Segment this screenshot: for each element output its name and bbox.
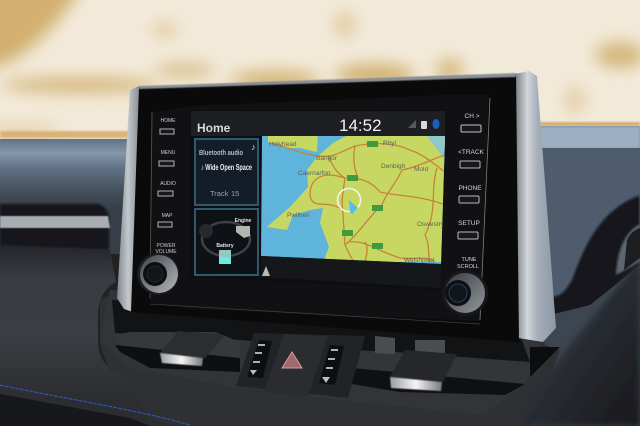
status icons — [408, 119, 440, 129]
place labels: Caernarfon — [298, 170, 331, 177]
dark shadow below unit — [112, 300, 530, 362]
button: SETUP: SETUP — [458, 220, 480, 227]
button: TRACK: <TRACK — [458, 149, 485, 156]
left button column — [155, 118, 177, 255]
silver bezel left — [117, 86, 139, 312]
header bar — [191, 111, 445, 136]
audio panel: 15 — [231, 189, 239, 198]
button: CH: CH > — [464, 113, 480, 120]
text: track number: Track — [210, 189, 229, 198]
label: TUNE SCROLL: SCROLL — [457, 264, 479, 270]
energy monitor panel: Battery — [216, 243, 234, 249]
button: CH — [461, 113, 481, 132]
map bottom bar — [261, 256, 441, 288]
right vent lever — [390, 350, 457, 391]
vent and hazard console — [112, 300, 530, 398]
button: SETUP — [458, 220, 480, 239]
energy monitor panel — [195, 209, 258, 275]
right button column — [457, 113, 485, 270]
head unit body — [117, 71, 556, 342]
button: AUDIO: AUDIO — [160, 181, 176, 187]
hazard switch cluster — [236, 333, 365, 398]
label: POWER VOLUME — [155, 243, 177, 255]
energy monitor panel: Engine — [235, 218, 252, 224]
right switch — [319, 345, 344, 385]
place labels: Oswestry — [417, 221, 445, 228]
button: PHONE: PHONE — [458, 185, 482, 192]
title: Home: Home — [197, 121, 231, 135]
clock: 14:52 — [339, 116, 382, 135]
text: Bluetooth audio: Bluetooth audio — [199, 148, 243, 157]
icon: traffic cone — [262, 266, 270, 276]
road number badges — [342, 141, 383, 249]
dashboard upper surface — [0, 126, 640, 300]
right dashboard: grained panel and dark shape — [510, 148, 640, 426]
current position marker — [338, 188, 360, 214]
place labels: Bangor — [316, 155, 338, 162]
text: track title: ♪ Wide Open Space — [201, 163, 252, 172]
label: POWER VOLUME: POWER — [157, 243, 176, 249]
icon: engine — [236, 226, 250, 238]
Anglesey — [268, 136, 318, 152]
left air vent strip — [0, 204, 110, 250]
button: TRACK — [458, 149, 485, 168]
place labels: Pwllheli — [287, 212, 309, 219]
hazard button triangle — [282, 352, 302, 368]
button: MENU: MENU — [161, 150, 176, 156]
vent slats — [115, 332, 240, 358]
screen background — [190, 110, 445, 290]
place labels — [269, 140, 445, 264]
button: PHONE — [458, 185, 482, 203]
left vent lever — [160, 331, 225, 366]
label: POWER VOLUME: VOLUME — [155, 249, 177, 255]
blurred sunlit background — [0, 0, 640, 140]
place labels: Denbigh — [381, 163, 406, 170]
place labels: Welshpool — [404, 257, 435, 264]
icon: battery — [219, 250, 231, 264]
steering wheel blur at bottom right — [522, 260, 640, 426]
map — [260, 134, 450, 270]
place labels: Mold — [414, 166, 428, 173]
label: TUNE SCROLL — [457, 257, 479, 270]
silver bezel right — [515, 71, 556, 342]
blue stitching — [0, 385, 190, 425]
power volume knob — [137, 253, 179, 295]
place labels: Rhyl — [383, 140, 397, 147]
icon: music note: ♪ — [251, 142, 256, 152]
audio panel — [195, 139, 258, 205]
tune scroll knob — [442, 270, 488, 316]
icon: wheels — [199, 224, 213, 238]
roads — [272, 143, 445, 270]
touchscreen — [191, 111, 445, 276]
land — [267, 134, 445, 262]
lower left dashboard panel — [0, 246, 240, 426]
left switch — [247, 340, 272, 378]
button: HOME: HOME — [160, 118, 176, 124]
button: MAP: MAP — [162, 213, 173, 219]
console recess floor and lower trim — [100, 290, 560, 426]
place labels: Holyhead — [269, 141, 297, 148]
label: TUNE SCROLL: TUNE — [462, 257, 477, 263]
black glass fascia — [131, 74, 519, 342]
